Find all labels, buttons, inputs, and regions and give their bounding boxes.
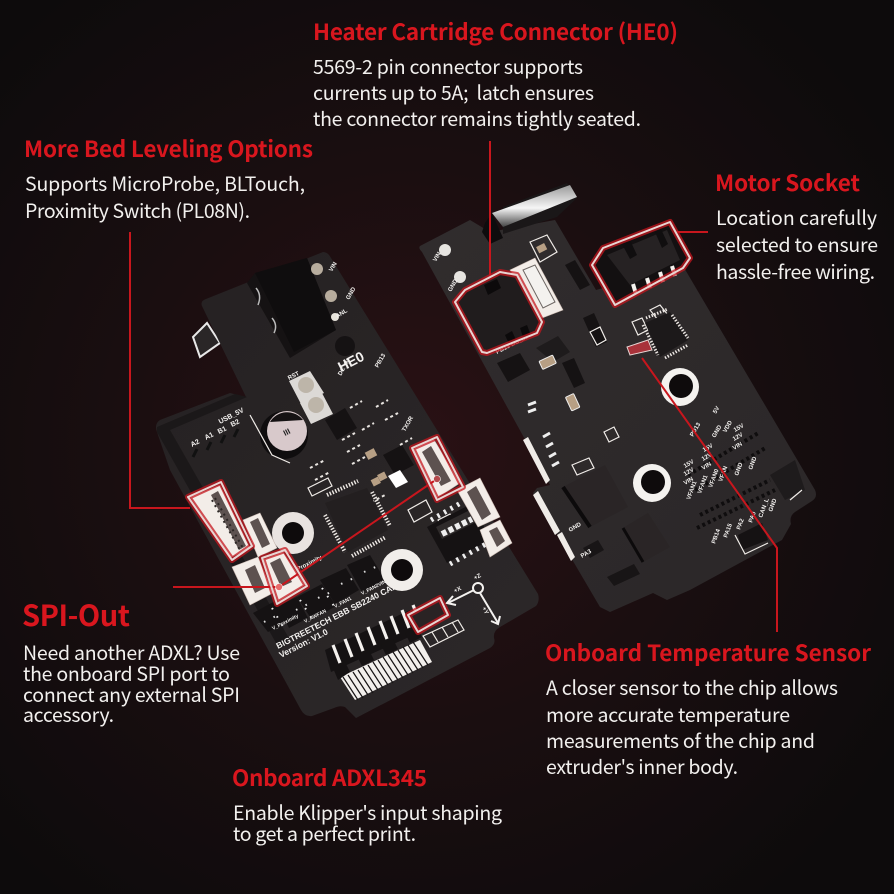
silk labels <box>190 407 245 457</box>
power pads: VIN <box>433 251 443 263</box>
reset and boot buttons: RST <box>287 371 301 382</box>
DIP switch <box>427 500 490 564</box>
heading: Motor Socket <box>715 166 861 198</box>
text: more bed leveling options <box>24 132 313 224</box>
pin header silk labels: GND <box>568 522 583 534</box>
heading: Heater Cartridge Connector (HE0) <box>313 15 678 47</box>
controller chip <box>643 309 688 358</box>
body: more accurate temperature <box>546 699 790 728</box>
body: the onboard SPI port to <box>23 658 230 687</box>
pin header silk labels: VFAN1 <box>697 474 710 495</box>
leader: bed leveling <box>130 232 190 508</box>
jumper row: V_FAN1 <box>333 596 353 610</box>
power pads <box>311 261 358 321</box>
highlight: heater connector <box>455 272 542 353</box>
body: connect any external SPI <box>23 679 240 708</box>
jumper row: V_Proximity <box>271 613 300 632</box>
silk labels: B2 <box>230 418 241 429</box>
pin header silk labels: GND <box>712 424 724 439</box>
body <box>233 797 502 847</box>
body: Need another ADXL? Use <box>23 637 240 666</box>
board name: BIGTREETECH EBB SB2240 CAN <box>274 581 399 651</box>
white JST connectors <box>190 438 512 605</box>
body: Location carefully <box>716 202 877 231</box>
small components <box>497 235 668 475</box>
power block upper <box>563 465 628 527</box>
highlight: bed leveling connector <box>188 482 252 560</box>
body <box>546 672 838 780</box>
body <box>716 202 878 285</box>
mount circle <box>335 336 355 356</box>
pin header silk labels: VIN <box>732 442 744 452</box>
pin header silk labels: PA0 <box>748 510 758 524</box>
mounting holes <box>272 512 423 591</box>
body: Supports MicroProbe, BLTouch, <box>25 168 305 197</box>
small components: TXOR <box>402 415 415 433</box>
inductor comb pins <box>325 605 432 700</box>
white connector <box>510 258 563 318</box>
jumper row: Proximity <box>296 555 324 573</box>
highlight: SPI connector <box>262 550 307 604</box>
power pads: ANL <box>335 308 349 320</box>
pin header silk labels: GND <box>768 497 779 513</box>
small parts row <box>423 620 464 647</box>
body: the connector remains tightly seated. <box>313 103 641 132</box>
small components <box>250 352 456 530</box>
power block lower <box>623 513 670 562</box>
pin header silk labels: PA2 <box>736 517 746 531</box>
power pads: GND <box>346 286 358 301</box>
leader: motor socket <box>677 231 708 233</box>
pin header silk labels: 12V <box>732 432 744 443</box>
silk labels: A2 <box>190 438 201 449</box>
end connector shell <box>157 394 290 650</box>
body <box>313 51 641 132</box>
pin header silk labels: PB14 <box>711 528 722 545</box>
heading: Onboard ADXL345 <box>232 761 427 793</box>
small components: DC_IN <box>338 358 352 377</box>
side bracket <box>193 323 220 357</box>
pin header silk labels: 5V <box>713 406 721 415</box>
pin header silk labels <box>495 335 779 560</box>
lower footprints <box>583 540 640 586</box>
right circuit board <box>419 183 816 612</box>
body: extruder's inner body. <box>546 751 738 780</box>
power pads <box>433 244 466 293</box>
body: Proximity Switch (PL08N). <box>25 195 250 224</box>
body: A closer sensor to the chip allows <box>546 672 838 701</box>
main MCU chip <box>325 481 390 556</box>
pin header silk labels: PB13 DC_IN <box>495 335 529 356</box>
pin header silk labels: 15V <box>733 423 745 434</box>
left circuit board <box>156 252 539 718</box>
leader: heater connector <box>489 141 491 278</box>
white side clips <box>523 437 575 561</box>
capacitor <box>260 411 308 459</box>
jumper row <box>253 555 388 632</box>
highlight: ADXL345 <box>408 598 448 632</box>
body: measurements of the chip and <box>546 725 815 754</box>
body: hassle-free wiring. <box>716 256 875 285</box>
pin header silk labels: VDD <box>723 419 734 434</box>
pin header silk labels: GND <box>748 455 759 471</box>
heading: Onboard Temperature Sensor <box>545 636 871 668</box>
power pads: VIN <box>329 261 339 273</box>
text: onboard temperature sensor <box>545 636 871 780</box>
pin header silk labels: 15V <box>683 459 695 470</box>
pin header silk labels: VIN <box>701 462 713 472</box>
pin header silk labels: VIN <box>683 477 695 487</box>
jumper row: V_AWFAN <box>303 608 328 625</box>
silk labels: A1 <box>204 431 215 442</box>
leader: SPI out <box>173 479 437 587</box>
pin header silk labels: VFAN1 <box>686 480 699 501</box>
reset and boot buttons <box>287 371 333 424</box>
body: selected to ensure <box>716 229 878 258</box>
body <box>25 168 305 224</box>
board body <box>419 220 816 612</box>
pin header silk labels: VFAN0 <box>708 468 721 489</box>
small components: PB13 <box>375 352 388 369</box>
text: onboard ADXL345 <box>232 761 502 847</box>
pin header silk labels: 12V <box>701 452 713 463</box>
silk labels: B1 <box>217 425 228 436</box>
heading: SPI-Out <box>22 593 130 635</box>
jumper row: V_FAN2VIN <box>360 579 388 597</box>
silk labels: USB_5V <box>218 407 245 426</box>
board body <box>156 252 539 718</box>
USB metal shell <box>482 183 577 244</box>
pin header silk labels: 12V <box>683 467 695 478</box>
pin header silk labels: 15V <box>702 443 714 454</box>
callout leaders <box>130 141 777 632</box>
accelerometer axes: +X <box>453 586 463 595</box>
text: heater cartridge connector <box>313 15 678 132</box>
HE0 label: HE0 <box>335 348 367 375</box>
body: currents up to 5A; latch ensures <box>313 77 594 106</box>
footprint at right <box>735 460 805 554</box>
body: Enable Klipper's input shaping <box>233 797 502 826</box>
version label: Version: V1.0 <box>277 627 330 660</box>
pin header silk labels: CAN_L <box>758 498 771 519</box>
pin header silk labels: PD13 <box>690 421 703 438</box>
body: to get a perfect print. <box>233 818 416 847</box>
body: 5569-2 pin connector supports <box>313 51 583 80</box>
pin header silk labels: PA15 <box>723 522 734 539</box>
highlight: motor socket <box>592 222 690 305</box>
heading: More Bed Leveling Options <box>24 132 313 164</box>
pin header silk labels: PA3 <box>580 549 593 560</box>
accelerometer axes: +Z <box>473 573 483 582</box>
accelerometer axes: +Y <box>480 606 489 616</box>
leader: temperature sensor <box>642 358 777 632</box>
text: motor socket <box>715 166 878 285</box>
accelerometer axes <box>447 573 500 624</box>
mounting holes <box>633 368 699 502</box>
body: accessory. <box>23 699 114 728</box>
highlight: upper JST connector <box>412 437 463 500</box>
text: SPI-out <box>22 593 240 728</box>
highlight: temperature sensor <box>627 340 652 355</box>
pin header silk labels: GND <box>734 461 745 477</box>
leader end dots <box>276 476 440 590</box>
pin header silk labels: VFAN <box>718 466 729 483</box>
power pads: GND <box>448 278 460 293</box>
body <box>23 637 240 728</box>
capacitor: III <box>282 427 292 438</box>
heater terminal block <box>247 258 336 358</box>
